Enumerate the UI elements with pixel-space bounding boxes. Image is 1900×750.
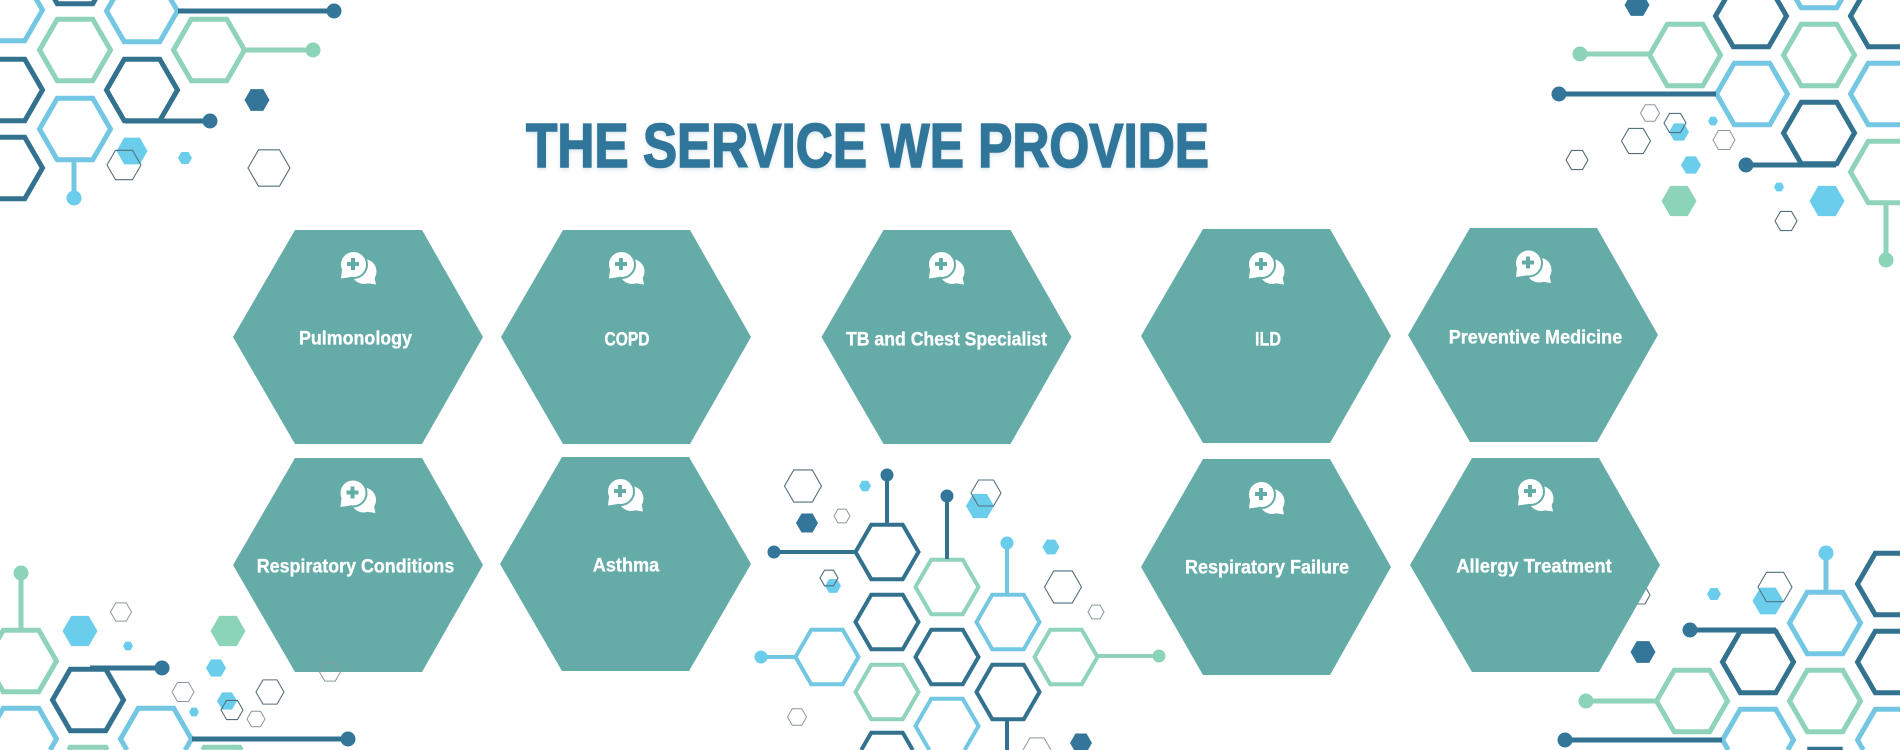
honeycomb outlines [0,630,241,750]
service hexagon: Asthma [500,457,751,671]
icon: medical chat bubbles [607,478,644,512]
label: Allergy Treatment [1456,556,1612,578]
icon: medical chat bubbles [340,480,376,513]
cluster: top right honeycomb [1552,0,1900,268]
label: Respiratory Failure [1185,558,1349,578]
cluster: bottom right honeycomb [1558,546,1900,750]
service hexagon: Allergy Treatment [1410,458,1660,672]
label: Respiratory Conditions [257,556,454,578]
service hexagon: Respiratory Failure [1141,459,1391,675]
icon: medical chat bubbles [1517,478,1554,512]
label: Pulmonology [299,328,412,350]
honeycomb outlines [1656,553,1900,750]
service hexagon: Pulmonology [233,230,483,444]
honeycomb outlines [1650,0,1900,203]
connector lines with dots [14,566,356,746]
icon: medical chat bubbles [1248,481,1284,514]
small floating hexagons [1566,0,1844,231]
honeycomb outlines [796,525,1098,750]
icon: medical chat bubbles [340,251,376,284]
label: TB and Chest Specialist [846,330,1048,350]
label: COPD [604,330,650,350]
small outline hexagon behind Allergy Treatment [1630,586,1650,604]
label: Preventive Medicine [1449,328,1622,348]
service hexagon: ILD [1141,229,1391,443]
small floating hexagons [62,603,284,727]
title: THE SERVICE WE PROVIDE [526,112,1209,181]
connector lines with dots [1552,46,1894,268]
connector lines with dots [754,468,1166,750]
connector lines with dots [1558,546,1834,748]
service hexagon: TB and Chest Specialist [822,230,1072,444]
service hexagon: Respiratory Conditions [233,458,483,672]
icon: medical chat bubbles [1515,250,1552,283]
small outline hexagon over Respiratory Conditions [320,663,340,681]
small floating hexagons [1630,572,1792,663]
cluster: top left honeycomb [0,0,342,206]
small floating hexagons [107,89,290,186]
cluster: bottom left honeycomb [0,566,356,750]
icon: medical chat bubbles [1248,251,1284,284]
icon: medical chat bubbles [608,251,644,284]
label: ILD [1255,330,1281,350]
cluster: bottom centre honeycomb [754,468,1166,750]
service hexagon: Preventive Medicine [1408,228,1658,442]
small floating hexagons [784,470,1104,750]
honeycomb outlines [0,0,244,199]
icon: medical chat bubbles [928,251,964,284]
label: Asthma [593,556,660,576]
connector lines with dots [66,4,342,206]
service hexagon: COPD [501,230,751,444]
